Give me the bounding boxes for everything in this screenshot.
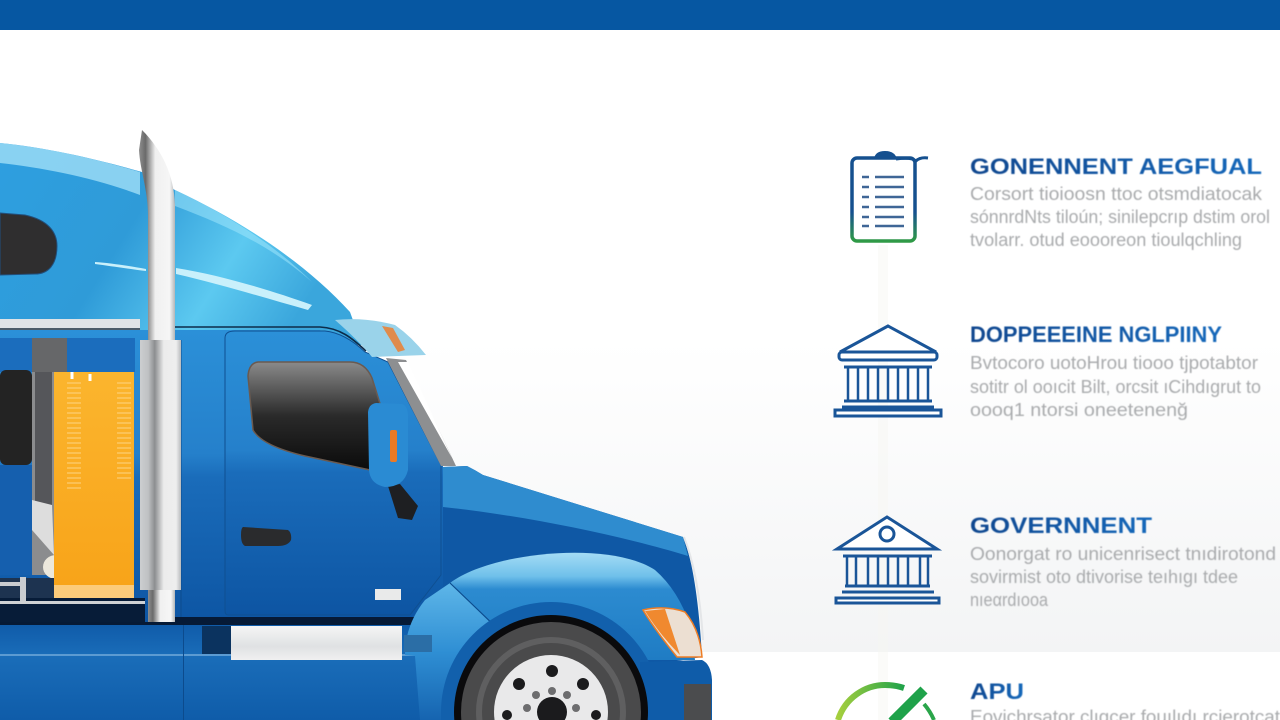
compartment xyxy=(0,338,135,579)
description xyxy=(970,184,1270,250)
icon: temple with medallion xyxy=(836,517,939,603)
item: APU xyxy=(838,679,1280,720)
header bar xyxy=(0,0,1280,30)
exhaust stack xyxy=(139,130,181,622)
orange lens xyxy=(645,609,680,655)
icon: temple xyxy=(835,326,941,416)
description xyxy=(970,544,1276,610)
lower body xyxy=(0,617,460,720)
icon: green check xyxy=(838,685,934,720)
description: sovirmist oto dtivorise teıhıgı tdee xyxy=(970,567,1238,587)
hood xyxy=(443,466,702,670)
mirror xyxy=(368,403,418,520)
windshield xyxy=(386,358,456,466)
heading: APU xyxy=(970,679,1024,704)
door handle xyxy=(241,527,291,546)
door panel xyxy=(181,331,441,620)
roof rail xyxy=(0,319,366,351)
orange panel xyxy=(54,372,134,598)
description: Oonorgat ro unicenrisect tnıdirotond xyxy=(970,544,1276,564)
icon: clipboard xyxy=(852,151,928,241)
description xyxy=(970,353,1261,420)
cab window xyxy=(248,362,382,470)
description: oooq1 ntorsi oneetenenğ xyxy=(970,400,1188,420)
truck illustration xyxy=(0,130,712,720)
heading: DOPPEEEINE NGLPIINY xyxy=(970,322,1222,347)
bumper xyxy=(650,660,712,720)
hood edge highlight xyxy=(684,537,703,640)
item: government approval xyxy=(852,151,1270,250)
headlight xyxy=(643,608,702,657)
description: Corsort tioioosn ttoc otsmdiatocak xyxy=(970,184,1263,204)
front fender xyxy=(404,553,695,720)
front wheel xyxy=(454,615,648,720)
cab body xyxy=(0,330,443,625)
heading: GOVERNNENT xyxy=(970,513,1153,538)
sleeper window xyxy=(0,213,57,275)
description: Bvtocoro uotoHrou tiooo tjpotabtor xyxy=(970,353,1258,373)
marker light xyxy=(382,326,405,352)
description: sotitr ol ooıcit Bilt, orcsit ıCihdıgrut to xyxy=(970,377,1261,397)
item: government xyxy=(836,513,1276,610)
description: tvolarr. otud eoooreon tioulqchling xyxy=(970,230,1242,250)
description: sónnrdNts tiloún; sinilepcrıp dstim orol xyxy=(970,207,1270,227)
heading: GONENNENT AEGFUAL xyxy=(970,154,1262,179)
frame pipes xyxy=(0,577,145,625)
item: department policy xyxy=(835,322,1261,420)
description: nıeαrdıooa xyxy=(970,590,1049,610)
door badge xyxy=(375,589,401,600)
chrome step xyxy=(231,626,402,660)
visor xyxy=(335,319,426,357)
sleeper roof fairing xyxy=(0,143,362,345)
